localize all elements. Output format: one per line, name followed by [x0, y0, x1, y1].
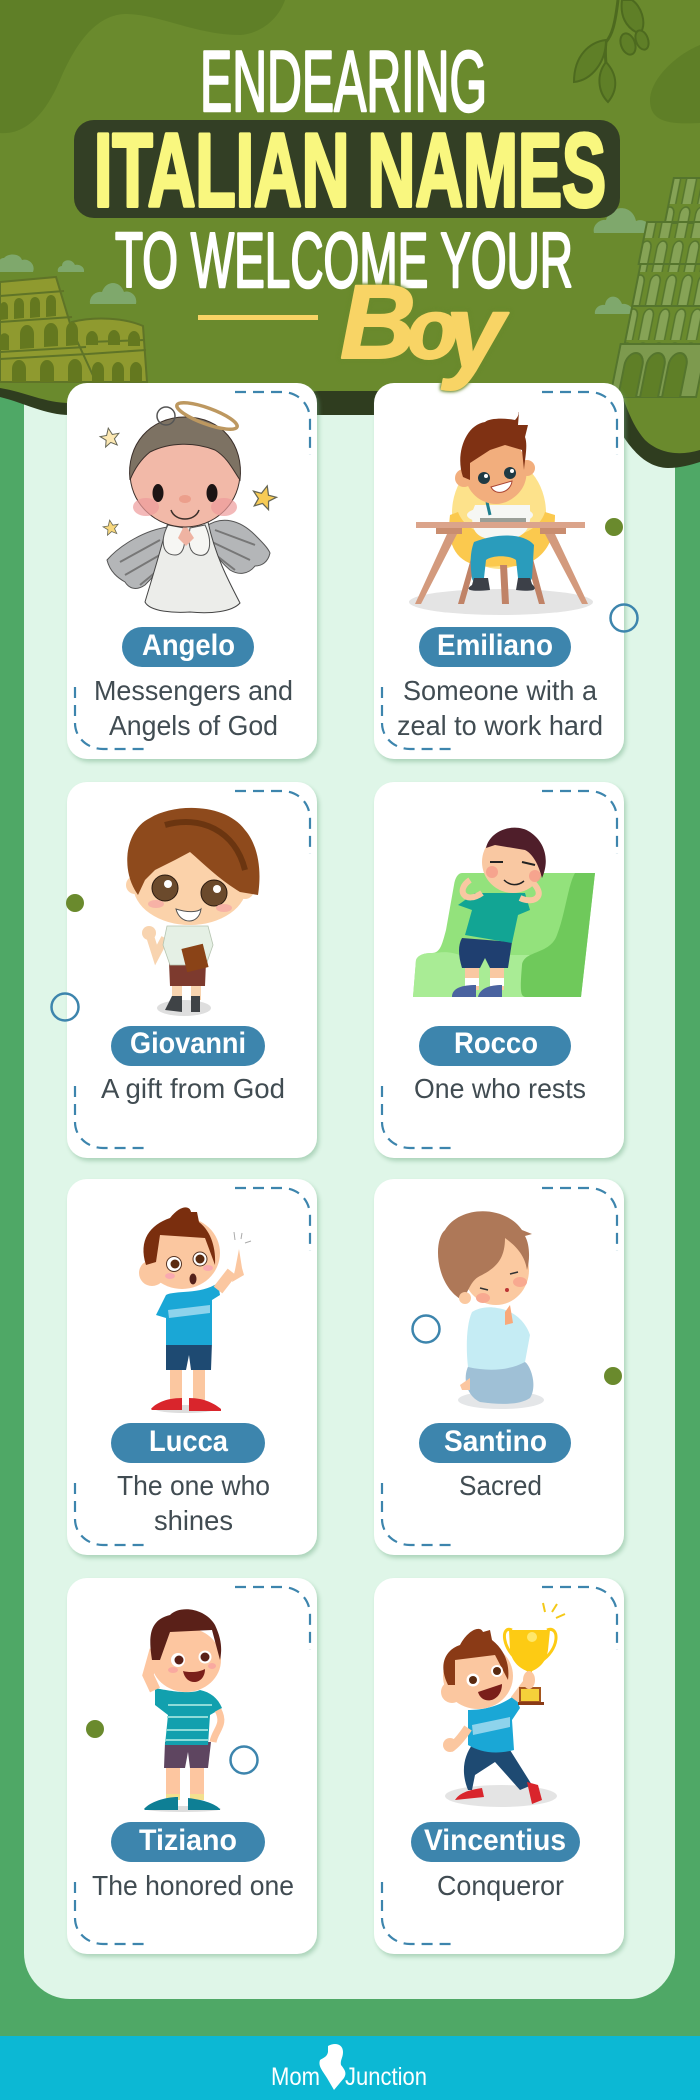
description: Messengers and	[94, 675, 293, 706]
accent dot	[66, 894, 84, 912]
header background	[0, 0, 700, 468]
name pill: Giovanni	[130, 1027, 246, 1060]
card: Rocco	[374, 782, 624, 1158]
description: One who rests	[414, 1073, 586, 1104]
illustration: boy resting on couch	[413, 828, 595, 997]
name pill: Lucca	[149, 1425, 228, 1458]
card: Emiliano	[374, 383, 638, 759]
name pill	[111, 1026, 265, 1066]
illustration: boy with book	[126, 808, 259, 1016]
footer band	[0, 2036, 700, 2100]
illustration: boy with trophy	[441, 1603, 565, 1807]
icon: clouds	[0, 208, 651, 314]
description: zeal to work hard	[397, 710, 603, 741]
accent dot	[605, 518, 623, 536]
heading line: Endearing: ENDEARING	[200, 34, 487, 130]
title	[74, 34, 620, 391]
icon: olive branch	[574, 0, 651, 102]
name pill	[122, 627, 254, 667]
description: A gift from God	[101, 1073, 285, 1104]
content panel	[24, 340, 675, 1999]
card: Vincentius	[374, 1578, 624, 1954]
name pill: Emiliano	[437, 629, 553, 662]
heading pill background	[74, 120, 620, 218]
accent dot	[86, 1720, 104, 1738]
illustration: angel boy	[99, 398, 279, 613]
logo mark	[319, 2044, 345, 2090]
logo text: Mom	[271, 2063, 320, 2091]
logo: MomJunction	[271, 2044, 427, 2091]
card: Tiziano	[67, 1578, 317, 1954]
icon: stars	[99, 427, 279, 536]
icon: trophy	[504, 1603, 565, 1705]
description	[397, 675, 603, 741]
illustration: boy praying	[438, 1211, 544, 1409]
description: The honored one	[92, 1870, 294, 1901]
name pill: Rocco	[454, 1027, 538, 1060]
name pill: Vincentius	[424, 1824, 566, 1857]
description: Someone with a	[403, 675, 597, 706]
heading word: Boy: y	[441, 274, 509, 391]
heading word: Boy: o	[407, 282, 458, 376]
logo text: Junction	[345, 2063, 427, 2091]
card: Giovanni	[52, 782, 317, 1158]
description: shines	[154, 1505, 233, 1536]
name pill: Angelo	[142, 629, 235, 662]
name pill	[419, 627, 571, 667]
description: Sacred	[459, 1470, 542, 1501]
name pill	[111, 1822, 265, 1862]
accent ring	[610, 604, 638, 632]
description	[117, 1470, 270, 1536]
illustration: boy pointing	[139, 1207, 251, 1413]
illustration: boy at desk	[409, 412, 593, 615]
name pill: Santino	[444, 1425, 547, 1458]
card: Angelo	[67, 383, 317, 759]
icon: colosseum	[0, 277, 147, 382]
icon: leaning tower	[610, 178, 700, 397]
description	[94, 675, 293, 741]
name pill	[419, 1423, 571, 1463]
description: Conqueror	[437, 1870, 564, 1901]
heading word: Boy: B	[340, 264, 416, 381]
accent ring	[412, 1316, 440, 1342]
description: The one who	[117, 1470, 270, 1501]
accent dot	[604, 1367, 622, 1385]
name pill	[419, 1026, 571, 1066]
illustration: boy saluting	[144, 1609, 222, 1812]
accent ring	[230, 1746, 258, 1774]
name pill	[111, 1423, 265, 1463]
description: Angels of God	[109, 710, 278, 741]
card: Lucca	[67, 1179, 317, 1555]
name pill: Tiziano	[139, 1824, 237, 1857]
accent line	[198, 315, 318, 320]
accent ring	[52, 994, 78, 1020]
card: Santino	[374, 1179, 624, 1555]
